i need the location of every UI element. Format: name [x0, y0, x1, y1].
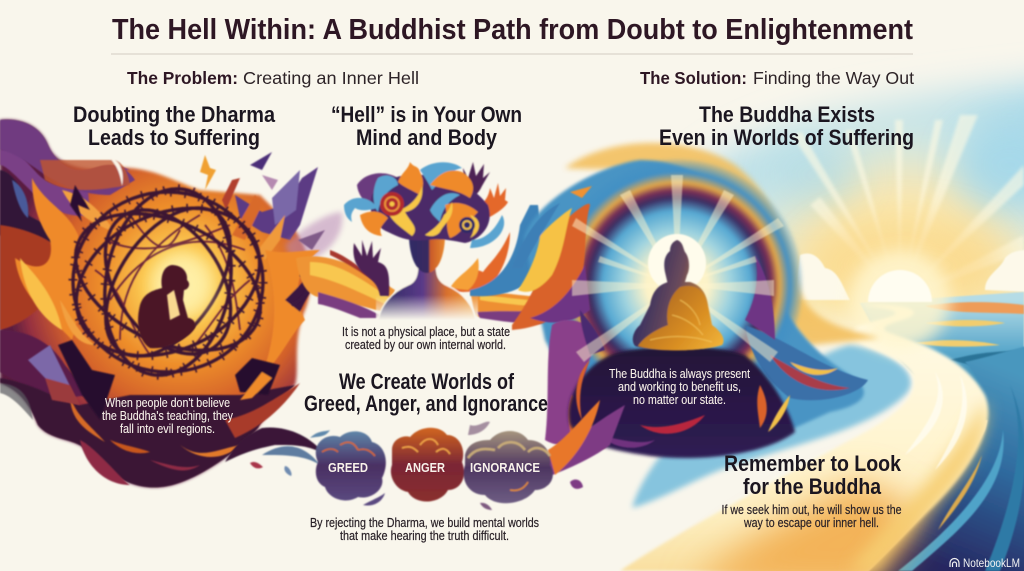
- heading: the buddha exists: Even in Worlds of Suffering: [659, 125, 914, 150]
- indigo accent: [12, 180, 28, 218]
- blue sky patches: [770, 120, 1024, 210]
- left connecting strand: [225, 427, 325, 462]
- right waves of the base: [745, 255, 868, 400]
- face: [409, 235, 445, 273]
- subheading: the solution: Finding the Way Out: [753, 68, 914, 88]
- yellow right edge of river: [850, 400, 986, 571]
- figure with head in hands: [138, 265, 195, 348]
- inner glow behind figure: [152, 253, 212, 317]
- text: buddha always present: [609, 367, 750, 407]
- title: The Hell Within: A Buddhist Path from Doubt to Enlightenment: [112, 14, 913, 46]
- red left cloud: [0, 225, 75, 330]
- pale purple fade right: [285, 212, 342, 268]
- heading: hell is in your own mind and body: [331, 102, 522, 150]
- hair orange lobes: [360, 162, 478, 238]
- crown of thorns: [52, 179, 284, 385]
- anger cloud: [391, 428, 464, 502]
- hair purple strands: [357, 173, 398, 210]
- heading: we create worlds: Greed, Anger, and Ignorance: [304, 391, 548, 416]
- subheading: the problem: [127, 68, 419, 88]
- small dark vine right: [292, 275, 320, 305]
- head: [664, 240, 689, 285]
- bust fade: [376, 295, 478, 325]
- text: buddha always present: and working to benefit us,: [618, 380, 741, 394]
- light rays: [572, 175, 784, 362]
- heading: remember to look: Remember to Look: [724, 451, 901, 476]
- dark mound: [569, 346, 795, 458]
- ignorance cloud: [464, 431, 553, 503]
- river: [620, 305, 988, 571]
- orange flames right of thorns: [262, 250, 322, 375]
- blue swell left of river: [632, 345, 911, 508]
- bottom orange and crimson streaks: [0, 383, 300, 485]
- cloud labels: ANGER: [405, 461, 445, 475]
- text: seek him out: way to escape our inner hell.: [743, 516, 879, 530]
- text: evil regions: the Buddha's teaching, they: [102, 409, 234, 423]
- text: seek him out: [722, 503, 902, 530]
- subheading: the solution: The Solution:: [640, 68, 747, 88]
- text: not a physical place: It is not a physical place, but a state: [342, 325, 510, 339]
- orange flames near Buddha: [548, 400, 600, 475]
- hair red swirl: [380, 192, 404, 216]
- orange robe: [638, 286, 724, 350]
- cloud labels: IGNORANCE: [470, 461, 540, 475]
- text: evil regions: fall into evil regions.: [120, 422, 215, 436]
- hair yellow flames: [388, 186, 479, 238]
- flames right of figure: [447, 232, 510, 292]
- text: buddha always present: no matter our state.: [633, 393, 726, 407]
- subheading: the problem: Creating an Inner Hell: [243, 68, 419, 88]
- cloud crest strokes: [322, 439, 550, 490]
- greed cloud: [316, 431, 386, 500]
- warm light on the lower river: [690, 480, 925, 571]
- text: evil regions: [102, 396, 234, 436]
- blue outer wave: [524, 160, 864, 430]
- shore streaks: [898, 385, 1024, 571]
- subheading: the solution: [640, 68, 914, 88]
- right connecting strand: [540, 405, 625, 480]
- halo: [648, 234, 706, 292]
- heading: doubting the dharma: Leads to Suffering: [88, 125, 260, 150]
- blue strand: [262, 446, 320, 465]
- stray wisps: [250, 422, 583, 510]
- robe folds: [650, 300, 712, 342]
- right orange hand: [470, 183, 508, 222]
- cloud labels: GREED: [328, 461, 368, 475]
- hair right swirl: [459, 217, 475, 233]
- illustration: doubting, flames and crown of thorns: [0, 120, 342, 487]
- heading: remember to look: [724, 451, 901, 499]
- illustration: Buddha in the worlds of suffering: [512, 143, 880, 458]
- heading: the buddha exists: [659, 102, 914, 150]
- heading: doubting the dharma: [73, 102, 275, 150]
- bottom dark band: [0, 378, 295, 487]
- dark left cloud: [0, 170, 72, 256]
- icon: notebook mark: [950, 558, 959, 567]
- blue flow right of figure: [470, 205, 545, 296]
- sky glow: [700, 80, 1024, 330]
- bust: [378, 262, 476, 322]
- heading: remember to look: for the Buddha: [743, 474, 881, 499]
- illustration: flame stream across the middle: [296, 250, 565, 324]
- text: rejecting the dharma: By rejecting the Dharma, we build mental worlds: [310, 516, 539, 530]
- broken shards upper right: [70, 152, 325, 260]
- heading: we create worlds: [304, 369, 548, 416]
- heading: we create worlds: We Create Worlds of: [339, 369, 514, 394]
- title divider: [111, 54, 913, 55]
- text: not a physical place: created by our own internal world.: [345, 338, 506, 352]
- warm glow around the sun: [805, 215, 1005, 315]
- heading: hell is in your own mind and body: Mind and Body: [356, 125, 497, 150]
- thorn vines: [52, 179, 284, 385]
- text: rejecting the dharma: [310, 516, 539, 543]
- heading: hell is in your own mind and body: “Hell” is in Your Own: [331, 102, 522, 127]
- sun rays: [792, 115, 1024, 300]
- torso and legs: [633, 282, 723, 350]
- left flames of the wave: [512, 186, 592, 330]
- orange left flames: [0, 158, 130, 400]
- purple upper swoosh: [0, 120, 130, 216]
- lower left strands: [545, 310, 605, 452]
- heading: doubting the dharma: Doubting the Dharma: [73, 102, 275, 127]
- hair blue lobes: [344, 162, 504, 248]
- clouds: [795, 250, 1024, 300]
- flame mass: [0, 120, 311, 487]
- right raised hand: [462, 162, 490, 205]
- text: evil regions: When people don't believe: [105, 396, 230, 410]
- left raised hand: [353, 240, 389, 296]
- orange flame inside: [450, 258, 479, 290]
- gold outer arc: [565, 143, 880, 345]
- text: buddha always present: The Buddha is always present: [609, 367, 750, 381]
- broken shards lower: [28, 340, 280, 420]
- text: not a physical place: [342, 325, 510, 352]
- sea: [860, 292, 1024, 420]
- text: seek him out: If we seek him out, he will show us the: [722, 503, 902, 517]
- hair base: [371, 174, 490, 243]
- thin inner branches: [95, 215, 250, 355]
- sun: [850, 250, 950, 350]
- illustration: three thought clouds: [225, 400, 625, 510]
- heading: the buddha exists: The Buddha Exists: [699, 102, 875, 127]
- mound accents: [576, 360, 790, 448]
- upper purple to red band: [0, 120, 135, 195]
- text: rejecting the dharma: that make hearing the truth difficult.: [340, 529, 509, 543]
- Buddha body: [633, 240, 724, 350]
- concentric rings: [551, 159, 803, 411]
- light gap under arm: [167, 290, 180, 320]
- illustration: sky, sun and river path: [620, 80, 1024, 571]
- thorn spikes: [52, 179, 284, 385]
- cloud labels: [328, 461, 540, 475]
- illustration: mind and body figure: [344, 162, 545, 325]
- right dark shore: [865, 345, 1024, 571]
- subheading: the problem: The Problem:: [127, 68, 238, 88]
- sea colour streaks: [915, 302, 1024, 380]
- river highlights: [855, 316, 967, 470]
